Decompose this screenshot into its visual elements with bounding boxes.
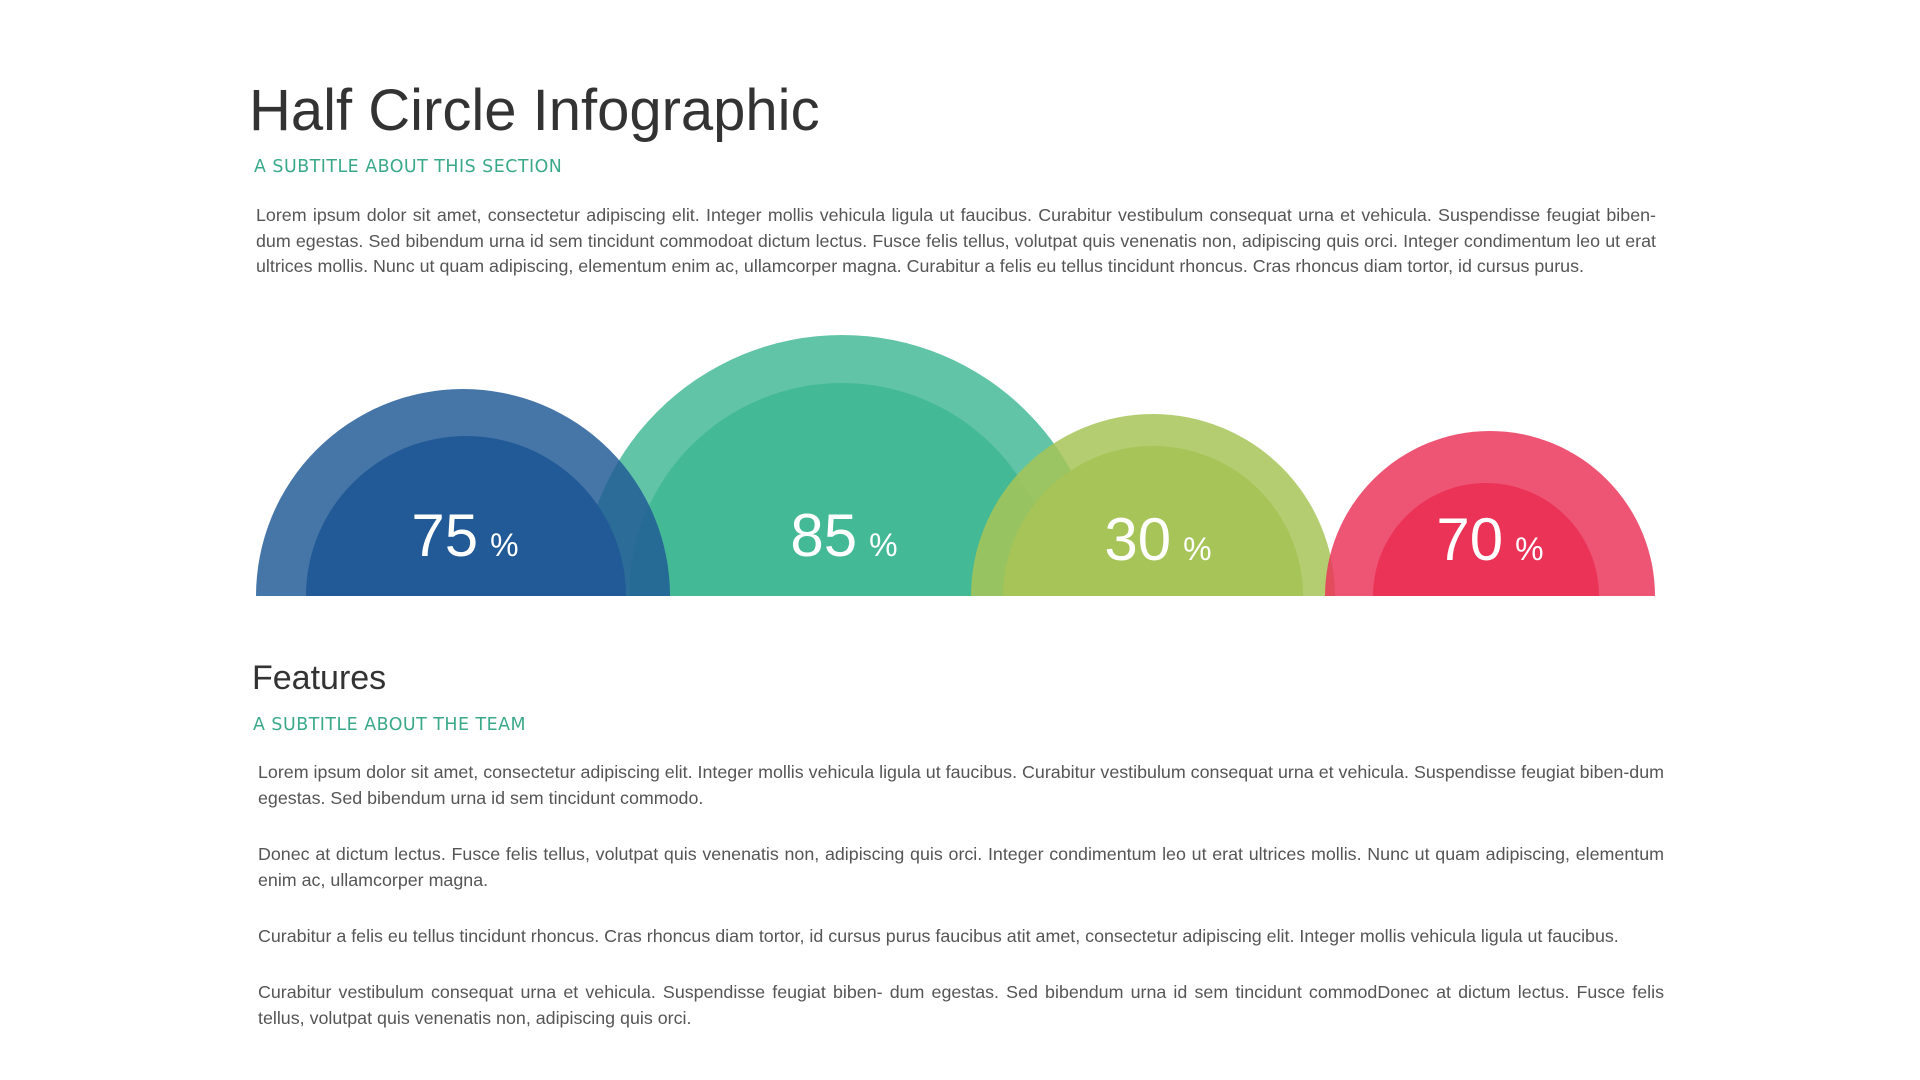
intro text: Lorem ipsum dolor sit amet, consectetur adipiscing elit. Integer mollis vehicula ligula ut faucibus. Curabitur vestibulum consequat urna et vehicula. Suspendisse feugiat biben-dum egestas. Sed bibendum urna id sem tincidunt commodoat dictum lectus. Fusce felis tellus, volutpat quis venenatis non, adipiscing quis orci. Integer condimentum leo ut erat ultrices mollis. Nunc ut quam adipiscing, elementum enim ac, ullamcorper magna. Curabitur a felis eu tellus tincidunt rhoncus. Cras rhoncus diam tortor, id cursus purus. [256,205,1656,276]
label 75%: 75 % [411,502,519,569]
features subtitle: A SUBTITLE ABOUT THE TEAM [253,715,526,735]
labels [411,502,1544,573]
label 70%: 70 % [1436,506,1544,573]
paragraph 2: Donec at dictum lectus. Fusce felis tellus, volutpat quis venenatis non, adipiscing quis orci. Integer condimentum leo ut erat ultrices mollis. Nunc ut quam adipiscing, elementum enim ac, ullamcorper magna. [258,844,1664,890]
features heading: Features [252,659,386,697]
half circle chart [256,335,1655,596]
label 85%: 85 % [790,502,898,569]
half circle: 85% [598,335,1070,596]
subtitle: A SUBTITLE ABOUT THIS SECTION [254,157,562,177]
paragraph 4: Curabitur vestibulum consequat urna et vehicula. Suspendisse feugiat biben- dum egestas. Sed bibendum urna id sem tincidunt commodDonec at dictum lectus. Fusce felis tellus, volutpat quis venenatis non, adipiscing quis orci. [258,982,1664,1028]
label 30%: 30 % [1104,506,1212,573]
paragraph 3: Curabitur a felis eu tellus tincidunt rhoncus. Cras rhoncus diam tortor, id cursus purus faucibus atit amet, consectetur adipiscing elit. Integer mollis vehicula ligula ut faucibus. [258,926,1619,946]
title: Half Circle Infographic [249,78,820,143]
half circle: 75% [256,389,670,596]
half circle: 70% [1325,431,1655,596]
half circle: 30% [971,414,1335,596]
paragraph 1: Lorem ipsum dolor sit amet, consectetur adipiscing elit. Integer mollis vehicula ligula ut faucibus. Curabitur vestibulum consequat urna et vehicula. Suspendisse feugiat biben-dum egestas. Sed bibendum urna id sem tincidunt commodo. [258,762,1664,808]
